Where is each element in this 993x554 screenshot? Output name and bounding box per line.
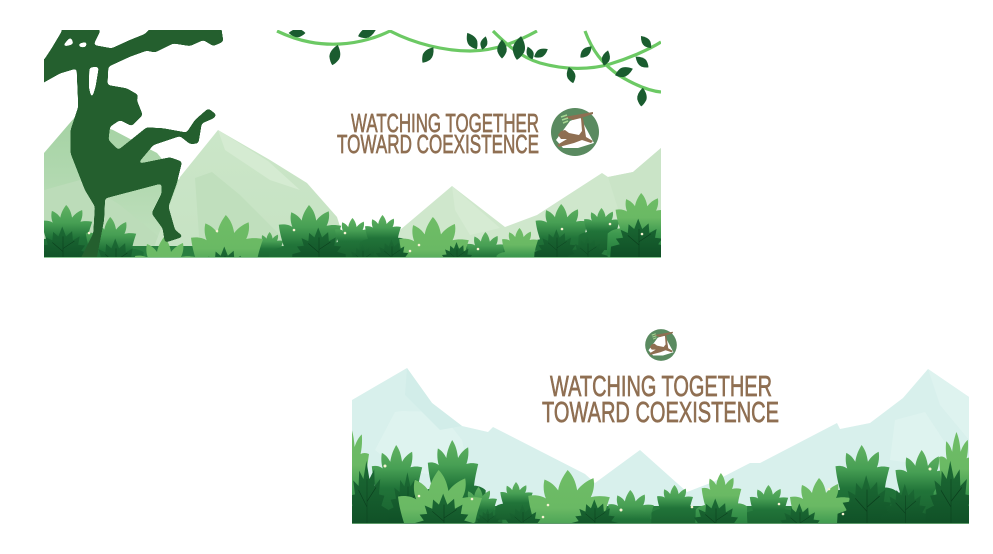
- ground edge line: [352, 523, 969, 524]
- logo: top banner: [551, 108, 599, 156]
- title: top banner: TOWARD COEXISTENCE: [337, 129, 539, 159]
- title: bottom banner: [542, 371, 779, 429]
- logo: bottom banner: [645, 329, 677, 361]
- banner: pale mountains and foliage: [352, 368, 969, 524]
- vines with leaves: [277, 25, 661, 107]
- banner: green jungle with monkey: [44, 30, 661, 258]
- title: top banner: WATCHING TOGETHER: [351, 108, 539, 138]
- title: top banner: [337, 108, 539, 159]
- mountains: pale blue range: [352, 368, 969, 506]
- ground edge line: [44, 257, 661, 258]
- title: bottom banner: TOWARD COEXISTENCE: [542, 397, 779, 429]
- bushes: bottom banner foliage: [352, 430, 969, 523]
- monkey silhouette hanging from branch: [44, 30, 223, 257]
- bushes: top banner foliage: [44, 193, 661, 257]
- mountains: green range: [44, 117, 661, 258]
- title: bottom banner: WATCHING TOGETHER: [550, 371, 772, 403]
